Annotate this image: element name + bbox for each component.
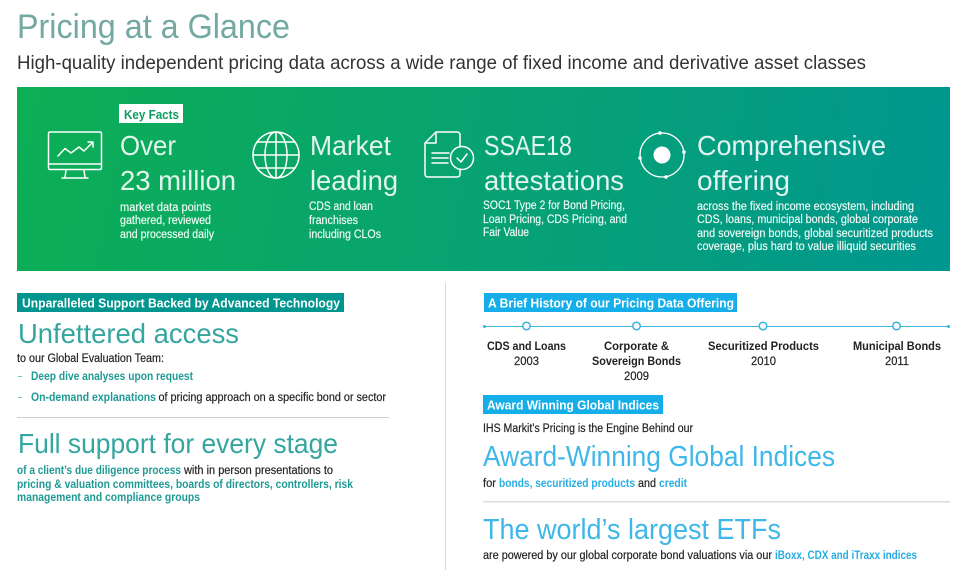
milestone: 2010: Securitized Products [708,341,819,353]
subtitle: High-quality independent pricing data across a wide range of fixed income and derivative asset classes [17,52,866,74]
fact: ssae18 attestations: attestations [484,165,624,196]
panel: key facts [17,87,950,271]
fact: comprehensive offering: Comprehensive [697,130,886,161]
bullet: on-demand explanations [18,392,386,404]
milestone: 2010 [708,341,819,368]
milestone: 2003: 2003 [514,356,539,368]
fact: market leading: leading [310,165,398,196]
title: Pricing at a Glance [17,8,290,46]
full support text: with in person presentations to [183,465,333,477]
panel: indices [483,395,950,562]
timeline [483,322,950,330]
milestone: 2003 [487,341,566,368]
etfs text: iBoxx, CDX and iTraxx indices [775,550,917,562]
fact: market leading: franchises [309,215,358,227]
award-winning text: bonds, securitized products [499,478,635,490]
fact: over 23 million: and processed daily [120,229,214,241]
fact: comprehensive offering [697,130,933,253]
fact: market leading: Market [310,130,391,161]
fact: ssae18 attestations [483,130,627,239]
fact: ssae18 attestations: Loan Pricing, CDS Pricing, and [483,214,627,226]
fact: market leading: including CLOs [309,229,381,241]
icon: globe [253,132,299,178]
full support text [17,465,354,504]
full support heading: Full support for every stage [18,428,338,459]
milestone: 2009: Corporate & [604,341,669,353]
key facts tag [119,104,183,123]
etfs heading: The world’s largest ETFs [483,514,781,546]
panel: history [483,293,950,383]
unfettered access heading: Unfettered access [18,318,239,349]
milestone: 2009: Sovereign Bonds [592,356,681,368]
milestone: 2011 [853,341,941,368]
panel: support [17,293,389,504]
fact: ssae18 attestations: SSAE18 [484,130,572,161]
award-winning text: credit [659,478,687,490]
indices intro: IHS Markit’s Pricing is the Engine Behind our [483,423,693,435]
fact: comprehensive offering: coverage, plus hard to value illiquid securities [697,241,916,253]
fact: comprehensive offering: CDS, loans, municipal bonds, global corporate [697,214,918,226]
fact: over 23 million [120,130,236,241]
full support text: of a client’s due diligence process [17,465,181,477]
fact: comprehensive offering: offering [697,165,790,196]
fact: ssae18 attestations: SOC1 Type 2 for Bond Pricing, [483,200,625,212]
bullet: on-demand explanations: of pricing approach on a specific bond or sector [158,392,386,404]
bullet: on-demand explanations: On-demand explanations [31,392,156,404]
milestone: 2011: Municipal Bonds [853,341,941,353]
full support text: pricing & valuation committees, boards of directors, controllers, risk [17,479,354,491]
milestone: 2003: CDS and Loans [487,341,566,353]
fact: over 23 million: Over [120,130,176,161]
fact: market leading [309,130,398,241]
fact: over 23 million: market data points [120,202,211,214]
award-winning text: and [638,478,656,490]
milestone: 2009 [592,341,681,383]
indices heading: Award Winning Global Indices [487,398,659,412]
fact: over 23 million: 23 million [120,165,236,196]
fact: market leading: CDS and loan [309,201,373,213]
fact: over 23 million: gathered, reviewed [120,215,211,227]
icon: monitor with chart [48,132,102,178]
support heading: Unparalleled Support Backed by Advanced Technology [22,296,341,310]
history heading: A Brief History of our Pricing Data Offering [488,296,734,310]
milestone: 2011: 2011 [885,356,909,368]
award-winning heading: Award-Winning Global Indices [483,441,835,473]
fact: comprehensive offering: across the fixed income ecosystem, including [697,201,914,213]
fact: comprehensive offering: and sovereign bonds, global securitized products [697,228,933,240]
key facts tag: Key Facts [124,108,179,122]
milestone: 2010: 2010 [751,356,776,368]
icon: orbit circle [638,131,686,179]
fact: ssae18 attestations: Fair Value [483,227,529,239]
bullet: deep dive: Deep dive analyses upon request [31,371,193,383]
award-winning text: for [483,478,496,490]
intro line: to our Global Evaluation Team: [17,353,164,365]
full support text: management and compliance groups [17,492,200,504]
etfs text: are powered by our global corporate bond valuations via our [483,550,772,562]
milestone: 2009: 2009 [624,371,649,383]
icon: document with check [425,132,474,177]
